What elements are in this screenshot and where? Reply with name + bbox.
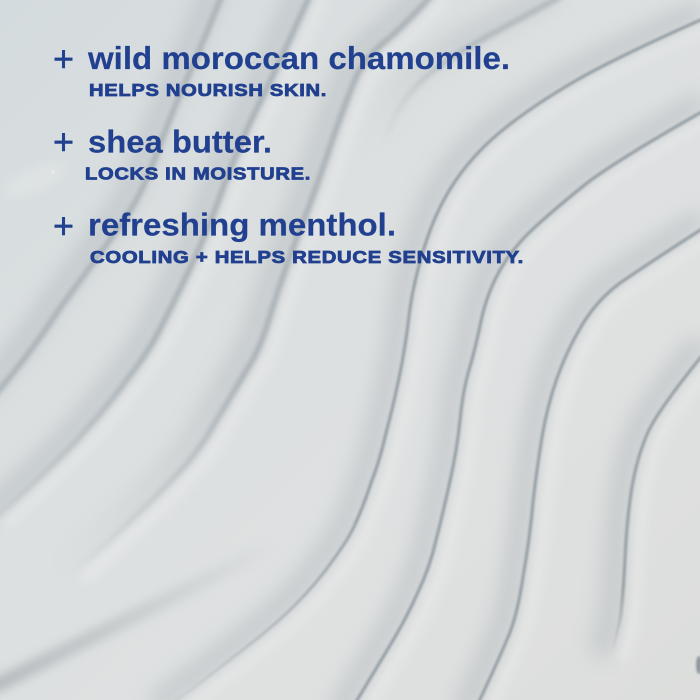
plus sign 3: + [53,205,74,246]
ingredient: shea butter [53,121,311,184]
heading 2: shea butter. [88,124,272,160]
plus sign 1: + [53,38,74,79]
subtext 3: COOLING + HELPS REDUCE SENSITIVITY. [90,247,524,267]
heading 1: wild moroccan chamomile. [87,40,510,76]
plus sign 2: + [53,121,74,162]
heading 3: refreshing menthol. [88,206,396,242]
ingredient: refreshing menthol [53,205,524,267]
subtext 1: HELPS NOURISH SKIN. [89,80,327,100]
ingredient: wild moroccan chamomile [53,38,510,100]
subtext 2: LOCKS IN MOISTURE. [85,164,311,184]
